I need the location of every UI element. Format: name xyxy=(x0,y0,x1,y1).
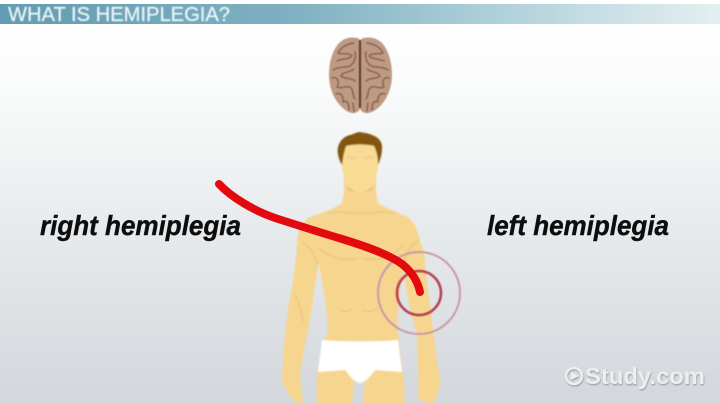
muscle shading xyxy=(296,187,420,322)
figure: man xyxy=(282,132,440,404)
label: left hemiplegia: left hemiplegia xyxy=(487,210,669,241)
icon: brain xyxy=(329,37,392,113)
underwear xyxy=(318,340,402,383)
face features xyxy=(346,157,374,159)
face xyxy=(342,144,378,193)
target circles xyxy=(378,252,460,334)
header bar xyxy=(0,3,720,26)
brain midline xyxy=(359,40,361,108)
arrow: red nerve line xyxy=(219,184,420,292)
heading: WHAT IS HEMIPLEGIA? xyxy=(8,3,230,26)
watermark: Study.com: Study.com xyxy=(585,363,705,389)
hair xyxy=(338,132,382,165)
body xyxy=(282,170,440,404)
label: right hemiplegia: right hemiplegia xyxy=(40,210,241,241)
